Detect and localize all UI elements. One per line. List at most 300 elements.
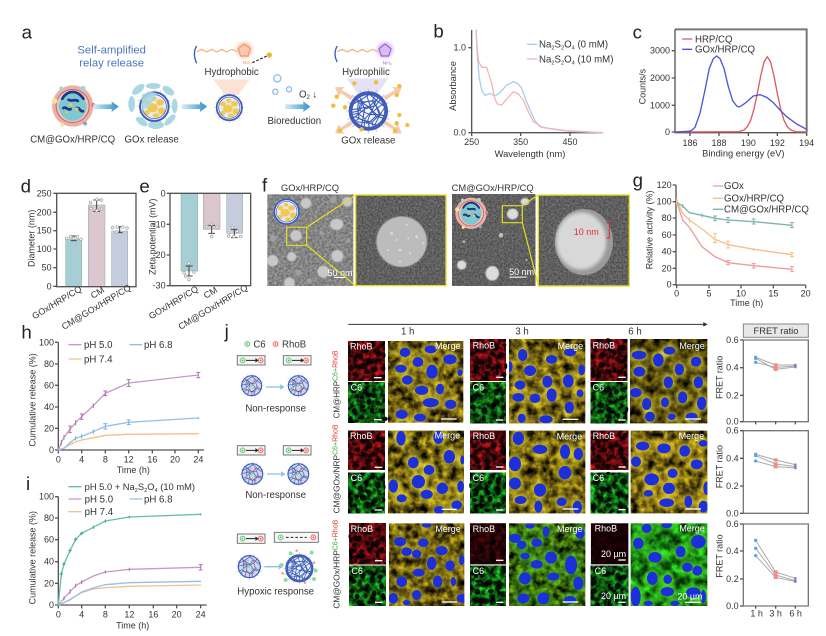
tick labels: 20 bbox=[44, 578, 54, 588]
panel d: diameter bar chart bbox=[21, 176, 136, 332]
tick labels: 0 bbox=[49, 445, 54, 455]
arrow: step 2 bbox=[182, 101, 207, 112]
category labels: CM bbox=[202, 285, 219, 301]
row label 3: CM@GOx/HRP bbox=[331, 550, 341, 609]
error bars and data dots bbox=[65, 198, 128, 241]
row label 1: C6+ bbox=[332, 368, 339, 381]
RhoB and C6 tiles, row 3: C6 bbox=[351, 566, 363, 576]
tick labels bbox=[153, 188, 166, 291]
3 h tiles, row 3: C6 bbox=[473, 566, 484, 576]
tick labels bbox=[39, 492, 206, 619]
timeline arrow bbox=[348, 323, 707, 326]
tick labels: 1.0 bbox=[453, 43, 466, 53]
icon: oxygen bubbles bbox=[273, 75, 292, 94]
FRET plot row 2: 0.4 bbox=[726, 453, 739, 463]
tick labels: 0 bbox=[56, 609, 61, 619]
microscopy columns 3 h and 6 h bbox=[469, 324, 808, 618]
label: O2 decrease: 2 bbox=[307, 95, 311, 101]
panel j: FRET schematic column bbox=[224, 320, 707, 609]
labels: stage names: GOx release bbox=[341, 135, 395, 146]
tick labels: 0 bbox=[665, 127, 670, 137]
tick labels: 60 bbox=[44, 380, 54, 390]
axis titles: Relative activity (%) bbox=[645, 191, 655, 269]
category labels: CM bbox=[89, 285, 106, 301]
category labels: CM@GOx/HRP/CQ bbox=[176, 282, 249, 332]
curve: GOx/HRP/CQ bbox=[675, 56, 807, 132]
legend: 2 bbox=[561, 60, 564, 66]
schematic: hypoxic response: Hypoxic response bbox=[237, 587, 314, 598]
3 h merge, row 1 bbox=[507, 339, 585, 423]
legend: pH 6.8 bbox=[144, 494, 172, 505]
3 h merge, row 3: Merge bbox=[557, 524, 582, 534]
bars bbox=[181, 193, 243, 271]
tick labels: 0.0 bbox=[453, 128, 466, 138]
titles: CM@GOx/HRP/CQ bbox=[452, 183, 534, 193]
panel f: TEM images bbox=[262, 175, 538, 288]
bars bbox=[66, 205, 128, 287]
tick labels: 100 bbox=[37, 244, 52, 254]
tick labels: 80 bbox=[662, 213, 672, 223]
curve: HRP/CQ bbox=[675, 57, 807, 132]
RhoB and C6 tiles, row 1: RhoB bbox=[350, 341, 372, 351]
tick labels: 80 bbox=[44, 359, 54, 369]
legend: C6 and RhoB: RhoB bbox=[282, 339, 306, 350]
tick labels: 350 bbox=[513, 137, 528, 147]
curve: 10 mM bbox=[476, 30, 603, 133]
6 h tiles, row 3: 20 µm bbox=[601, 591, 626, 601]
6 h merge, row 1: Merge bbox=[679, 341, 705, 351]
6 h tiles, row 2: RhoB bbox=[593, 431, 615, 441]
curve: GOx/HRP/CQ bbox=[677, 200, 792, 255]
TEM: GOx/HRP/CQ overview: 50 nm bbox=[328, 268, 352, 278]
merge image, row 2 bbox=[388, 431, 464, 514]
tick labels: 5 bbox=[706, 289, 711, 299]
row label 3: RhoB bbox=[332, 519, 339, 537]
tick labels bbox=[39, 337, 203, 464]
RhoB and C6 tiles, row 3 bbox=[349, 523, 386, 606]
6 h tiles, row 3: C6 bbox=[595, 566, 606, 576]
category labels: CM@GOx/HRP/CQ bbox=[60, 282, 133, 332]
axes bbox=[55, 342, 204, 453]
legend: S bbox=[555, 40, 561, 51]
6 h tiles, row 1: RhoB bbox=[593, 341, 615, 351]
3 h tiles, row 1: C6 bbox=[473, 383, 484, 393]
tick labels: 15 bbox=[768, 289, 778, 299]
tick labels: 24 bbox=[196, 609, 206, 619]
legend: GOx/HRP/CQ bbox=[724, 193, 785, 204]
axis titles: Time (h) bbox=[117, 465, 150, 475]
panel e: zeta potential bar chart: e bbox=[139, 176, 150, 197]
axis titles: Time (h) bbox=[730, 298, 763, 308]
time labels: 1 h bbox=[401, 327, 414, 338]
TEM: GOx/HRP/CQ overview bbox=[267, 194, 353, 288]
merge image, row 2: Merge bbox=[435, 431, 460, 441]
tick labels: 20 bbox=[44, 423, 54, 433]
axis titles: Cumulative release (%) bbox=[27, 511, 37, 604]
molecule: hydrophobic nitroimidazole chain bbox=[194, 42, 272, 66]
panel j: FRET schematic column: j bbox=[224, 320, 229, 341]
tick labels bbox=[650, 46, 814, 148]
tick labels: 60 bbox=[44, 535, 54, 545]
legend: S bbox=[555, 54, 561, 65]
merge image, row 3 bbox=[389, 522, 470, 606]
legend: O bbox=[147, 482, 155, 492]
FRET plot row 3: 0.2 bbox=[726, 574, 739, 584]
tick labels: 3000 bbox=[650, 46, 670, 56]
FRET plot row 1: 0.4 bbox=[726, 363, 739, 373]
RhoB and C6 tiles, row 3: RhoB bbox=[351, 524, 373, 534]
error bars and data dots bbox=[183, 223, 242, 281]
schematic: non-response 2 bbox=[237, 446, 311, 501]
label: hydrophilic: Hydrophilic bbox=[342, 67, 390, 78]
tick labels: 16 bbox=[148, 609, 158, 619]
tick labels: 0 bbox=[49, 600, 54, 610]
FRET plot row 1 bbox=[715, 335, 808, 427]
heading: self-amplified relay release bbox=[77, 44, 146, 70]
tick labels: 120 bbox=[657, 180, 672, 190]
axis titles bbox=[27, 353, 150, 475]
6 h tiles, row 3: RhoB bbox=[595, 524, 617, 534]
FRET plot row 2 bbox=[715, 426, 808, 518]
legend: 4 bbox=[155, 488, 158, 494]
6 h merge, row 3 bbox=[631, 522, 707, 607]
tick labels: 8 bbox=[103, 609, 108, 619]
labels: stage names: GOx release bbox=[125, 134, 179, 145]
tick labels: 188 bbox=[711, 138, 726, 148]
3 h tiles, row 1 bbox=[470, 339, 507, 423]
panel letter a: a bbox=[22, 21, 33, 42]
inset guides and dashed box bbox=[287, 195, 356, 286]
axis title: Diameter (nm) bbox=[27, 210, 37, 267]
FRET plot row 3: FRET ratio bbox=[715, 534, 725, 578]
tick labels: 192 bbox=[770, 138, 785, 148]
curve: pH 5.0 bbox=[58, 375, 198, 450]
tick labels: 40 bbox=[662, 247, 672, 257]
axis titles: Binding energy (eV) bbox=[702, 149, 785, 159]
legend bbox=[69, 482, 195, 518]
legend: pH 6.8 bbox=[144, 340, 172, 351]
legend: Na bbox=[539, 40, 551, 51]
row label 1: RhoB bbox=[332, 350, 339, 368]
legend: pH 7.4 bbox=[84, 354, 113, 365]
panel i: cumulative release chart with Na2S2O4: i bbox=[26, 473, 30, 494]
tick labels: 100 bbox=[39, 492, 54, 502]
3 h merge, row 2 bbox=[509, 431, 585, 514]
legend: 2 bbox=[135, 488, 138, 494]
6 h tiles, row 1: C6 bbox=[593, 383, 604, 393]
legend bbox=[527, 40, 613, 66]
label: bioreduction: Bioreduction bbox=[267, 116, 321, 127]
tick labels: 1000 bbox=[650, 100, 670, 110]
category labels: GOx/HRP/CQ bbox=[147, 284, 200, 321]
titles bbox=[281, 183, 534, 193]
legend: GOx bbox=[724, 181, 744, 192]
icon: GOx release particle bbox=[128, 82, 178, 129]
FRET plot row 3 bbox=[715, 519, 808, 618]
3 h tiles, row 2: C6 bbox=[473, 473, 484, 483]
axis titles: Absorbance bbox=[448, 61, 458, 111]
row label 1: CM@HRP bbox=[332, 381, 341, 418]
category labels: GOx/HRP/CQ bbox=[30, 284, 83, 321]
molecule: hydrophilic aminoimidazole chain bbox=[335, 42, 393, 66]
molecule: hydrophilic aminoimidazole chain: NH₂ bbox=[383, 60, 392, 66]
tick labels: 450 bbox=[562, 137, 577, 147]
axis titles bbox=[448, 61, 565, 159]
3 h tiles, row 3: RhoB bbox=[473, 524, 495, 534]
schematic: non-response 1: Non-response bbox=[245, 403, 306, 414]
panel b: absorbance spectra: b bbox=[433, 20, 444, 41]
curve: CM@GOx/HRP/CQ bbox=[677, 203, 792, 225]
6 h merge, row 3: Merge bbox=[679, 524, 705, 534]
tick labels: 190 bbox=[741, 138, 756, 148]
axis titles: Counts/s bbox=[637, 68, 647, 104]
legend: (10 mM) bbox=[158, 482, 195, 492]
axis titles bbox=[637, 68, 785, 159]
label: hydrophobic: Hydrophobic bbox=[205, 67, 259, 78]
FRET plot row 3: 0.0 bbox=[726, 601, 739, 611]
merge image, row 1: Merge bbox=[435, 341, 460, 351]
legend: pH 5.0 + Na bbox=[85, 482, 135, 492]
3 h merge, row 3 bbox=[509, 523, 585, 606]
tick labels: 80 bbox=[44, 513, 54, 523]
legend: 4 bbox=[572, 46, 575, 52]
curve: pH 5.0 bbox=[58, 567, 201, 605]
tick labels: -20 bbox=[153, 250, 166, 260]
tick labels: 150 bbox=[37, 226, 52, 236]
panel g: relative activity line chart bbox=[633, 170, 811, 308]
schematic: non-response 1 bbox=[237, 356, 311, 414]
panel g: relative activity line chart: g bbox=[633, 170, 643, 191]
tick labels: 10 bbox=[736, 289, 746, 299]
FRET plot row 1: 0.6 bbox=[726, 335, 739, 345]
curve: pH 5.0 + Na2S2O4 bbox=[58, 514, 201, 605]
axis titles bbox=[645, 191, 763, 308]
tick labels: 12 bbox=[124, 454, 134, 464]
legend: S bbox=[138, 482, 144, 492]
row label 2: RhoB bbox=[332, 424, 339, 442]
row label 3: C6+ bbox=[332, 537, 339, 550]
time labels bbox=[401, 327, 642, 338]
legend: 4 bbox=[572, 60, 575, 66]
legend: (10 mM) bbox=[575, 54, 613, 65]
labels: stage names bbox=[30, 134, 395, 146]
merge image, row 1 bbox=[388, 341, 463, 423]
panel b: absorbance spectra bbox=[433, 20, 613, 159]
label: O2 decrease: O bbox=[299, 89, 307, 100]
tick labels: 16 bbox=[147, 454, 157, 464]
titles: GOx/HRP/CQ bbox=[281, 183, 339, 193]
6 h tiles, row 3 bbox=[591, 523, 628, 606]
RhoB and C6 tiles, row 2: RhoB bbox=[350, 431, 372, 441]
axis titles: Cumulative release (%) bbox=[27, 353, 37, 447]
tick labels: 2000 bbox=[650, 73, 670, 83]
panel h: cumulative release chart bbox=[21, 321, 204, 475]
legend: 2 bbox=[561, 46, 564, 52]
tick labels: 100 bbox=[39, 337, 54, 347]
FRET plot row 2: 0.2 bbox=[726, 481, 739, 491]
legend: pH 7.4 bbox=[85, 507, 114, 518]
merge image, row 3: Merge bbox=[435, 524, 461, 534]
inset guides and dashed box bbox=[502, 195, 538, 286]
tick labels bbox=[37, 188, 52, 291]
frame and axes bbox=[672, 29, 807, 136]
tick labels: 200 bbox=[37, 207, 52, 217]
tick labels: 20 bbox=[662, 263, 672, 273]
FRET plot row 3: 0.6 bbox=[726, 519, 739, 529]
tick labels: 186 bbox=[682, 138, 697, 148]
axes bbox=[468, 30, 603, 136]
curve: pH 6.8 bbox=[58, 581, 201, 605]
error bars bbox=[677, 198, 794, 272]
legend: pH 5.0 bbox=[85, 494, 113, 505]
tick labels: 0 bbox=[47, 281, 52, 291]
heading: self-amplified relay release: Self-amplified bbox=[77, 44, 146, 56]
tick labels: 8 bbox=[103, 454, 108, 464]
axis titles: Time (h) bbox=[116, 620, 149, 630]
tick labels: 12 bbox=[124, 609, 134, 619]
tick labels: 0 bbox=[161, 188, 166, 198]
tick labels: 250 bbox=[464, 137, 479, 147]
curve: pH 7.4 bbox=[58, 585, 201, 605]
panel d: diameter bar chart: d bbox=[21, 176, 31, 197]
FRET plot row 1: FRET ratio bbox=[715, 356, 725, 399]
axis title: Zeta potential (mV) bbox=[147, 198, 157, 275]
icon: swollen hydrophilic nanoparticle bbox=[341, 83, 396, 139]
3 h tiles, row 2: RhoB bbox=[473, 431, 495, 441]
TEM zoom: membrane-coated particle with 10 nm shell: 10 nm bbox=[574, 227, 599, 237]
tick labels bbox=[657, 180, 811, 299]
6 h tiles, row 3: 20 µm bbox=[601, 549, 626, 559]
panel c: XPS binding energy chart: c bbox=[633, 21, 642, 42]
tick labels: 0 bbox=[674, 289, 679, 299]
tick labels: 250 bbox=[37, 188, 52, 198]
row label 2: C6+ bbox=[332, 442, 339, 455]
axes bbox=[673, 185, 806, 288]
arrow: step 1 bbox=[93, 101, 119, 112]
tick labels: 40 bbox=[44, 557, 54, 567]
legend: 2 bbox=[551, 46, 555, 52]
TEM: CM@GOx/HRP/CQ overview: 50 nm bbox=[509, 267, 534, 277]
error bars bbox=[60, 513, 203, 600]
TEM zoom: GOx/HRP/CQ particle bbox=[356, 195, 446, 286]
arrow: bioreduction bbox=[285, 101, 310, 112]
tick labels: 0 bbox=[56, 454, 61, 464]
beam: hydrophilic zoom wedge bbox=[347, 78, 388, 95]
tick labels: -10 bbox=[153, 219, 166, 229]
FRET plot row 3: 0.4 bbox=[726, 546, 739, 556]
legend: GOx/HRP/CQ bbox=[695, 45, 756, 56]
label: O2 decrease: ↓ bbox=[310, 89, 317, 100]
legend: O bbox=[564, 40, 572, 51]
tick labels bbox=[453, 43, 577, 147]
legend bbox=[69, 340, 172, 365]
legend: 2 bbox=[144, 488, 147, 494]
tick labels: 24 bbox=[193, 454, 203, 464]
arrows: GOx escaping bbox=[335, 87, 402, 134]
legend: pH 5.0 bbox=[84, 340, 112, 351]
curve: 0 mM bbox=[476, 30, 603, 133]
6 h tiles, row 1 bbox=[591, 338, 628, 423]
FRET header box bbox=[743, 324, 808, 337]
row label 2: CM@GOx/NRP bbox=[331, 455, 341, 513]
labels: stage names: CM@GOx/HRP/CQ bbox=[30, 134, 116, 145]
6 h merge, row 1 bbox=[630, 339, 707, 423]
tick labels: 60 bbox=[662, 230, 672, 240]
curve: GOx bbox=[677, 202, 792, 269]
FRET plot row 2: FRET ratio bbox=[715, 445, 725, 488]
TEM: CM@GOx/HRP/CQ overview bbox=[452, 194, 535, 286]
panel i: cumulative release chart with Na2S2O4 bbox=[26, 473, 207, 630]
legend: O bbox=[564, 54, 572, 65]
panel a: self-amplified relay release schematic bbox=[22, 21, 409, 146]
schematic: hypoxic response bbox=[236, 532, 319, 598]
FRET plot row 2: 0.0 bbox=[726, 508, 739, 518]
axes bbox=[55, 497, 207, 608]
legend: C6 and RhoB: C6 bbox=[253, 339, 266, 350]
3 h tiles, row 3 bbox=[470, 523, 506, 606]
panel e: zeta potential bar chart bbox=[139, 176, 251, 332]
3 h merge, row 1: Merge bbox=[558, 341, 583, 351]
legend bbox=[683, 34, 756, 56]
tick labels: 20 bbox=[801, 289, 811, 299]
tick labels: 40 bbox=[44, 402, 54, 412]
legend: HRP/CQ bbox=[695, 34, 733, 45]
tick labels: 50 bbox=[42, 263, 52, 273]
FRET plot row 1: 0.2 bbox=[726, 390, 739, 400]
RhoB and C6 tiles, row 1: C6 bbox=[351, 383, 362, 393]
axis titles bbox=[27, 511, 149, 630]
icon: hydrophobic nanoparticle bbox=[214, 92, 245, 123]
6 h tiles, row 2 bbox=[591, 431, 628, 513]
FRET plot row 1: 0.0 bbox=[726, 417, 739, 427]
TEM zoom: membrane-coated particle with 10 nm shell bbox=[538, 195, 629, 286]
legend: Na bbox=[539, 54, 551, 65]
icon: released GOx dots bbox=[331, 80, 409, 133]
RhoB and C6 tiles, row 2: C6 bbox=[351, 473, 362, 483]
6 h tiles, row 2: C6 bbox=[593, 473, 604, 483]
3 h merge, row 2: Merge bbox=[557, 431, 582, 441]
FRET header box: FRET ratio bbox=[754, 326, 798, 336]
frame and axis bbox=[167, 193, 251, 286]
tick labels: 4 bbox=[79, 609, 84, 619]
schematic: non-response 2: Non-response bbox=[245, 490, 306, 501]
FRET plot row 3: 3 h bbox=[769, 608, 782, 618]
tick labels: 4 bbox=[79, 454, 84, 464]
tick labels: 194 bbox=[799, 138, 814, 148]
legend: C6 and RhoB bbox=[245, 339, 306, 350]
error bars bbox=[61, 372, 200, 445]
legend: 2 bbox=[551, 60, 555, 66]
panel f: TEM images: f bbox=[262, 175, 268, 196]
tick labels: 0 bbox=[667, 280, 672, 290]
6 h merge, row 3: 20 µm bbox=[677, 591, 702, 601]
3 h tiles, row 2 bbox=[469, 431, 506, 513]
icon: CM@GOx/HRP/CQ particle bbox=[52, 85, 95, 127]
heading: self-amplified relay release: relay release bbox=[79, 58, 144, 70]
RhoB and C6 tiles, row 2 bbox=[348, 431, 386, 513]
beam: hydrophobic zoom wedge bbox=[213, 79, 250, 95]
molecule: hydrophobic nitroimidazole chain: NO₂ bbox=[243, 60, 252, 66]
6 h merge, row 2 bbox=[631, 431, 710, 513]
FRET plot row 2: 0.6 bbox=[726, 426, 739, 436]
axis titles: Wavelength (nm) bbox=[495, 149, 565, 159]
curve: pH 7.4 bbox=[58, 434, 198, 450]
legend: (0 mM) bbox=[575, 40, 608, 51]
time labels: 3 h bbox=[515, 327, 529, 338]
frame and axis bbox=[53, 193, 136, 287]
tick labels: 100 bbox=[657, 197, 672, 207]
tick labels: 20 bbox=[170, 454, 180, 464]
